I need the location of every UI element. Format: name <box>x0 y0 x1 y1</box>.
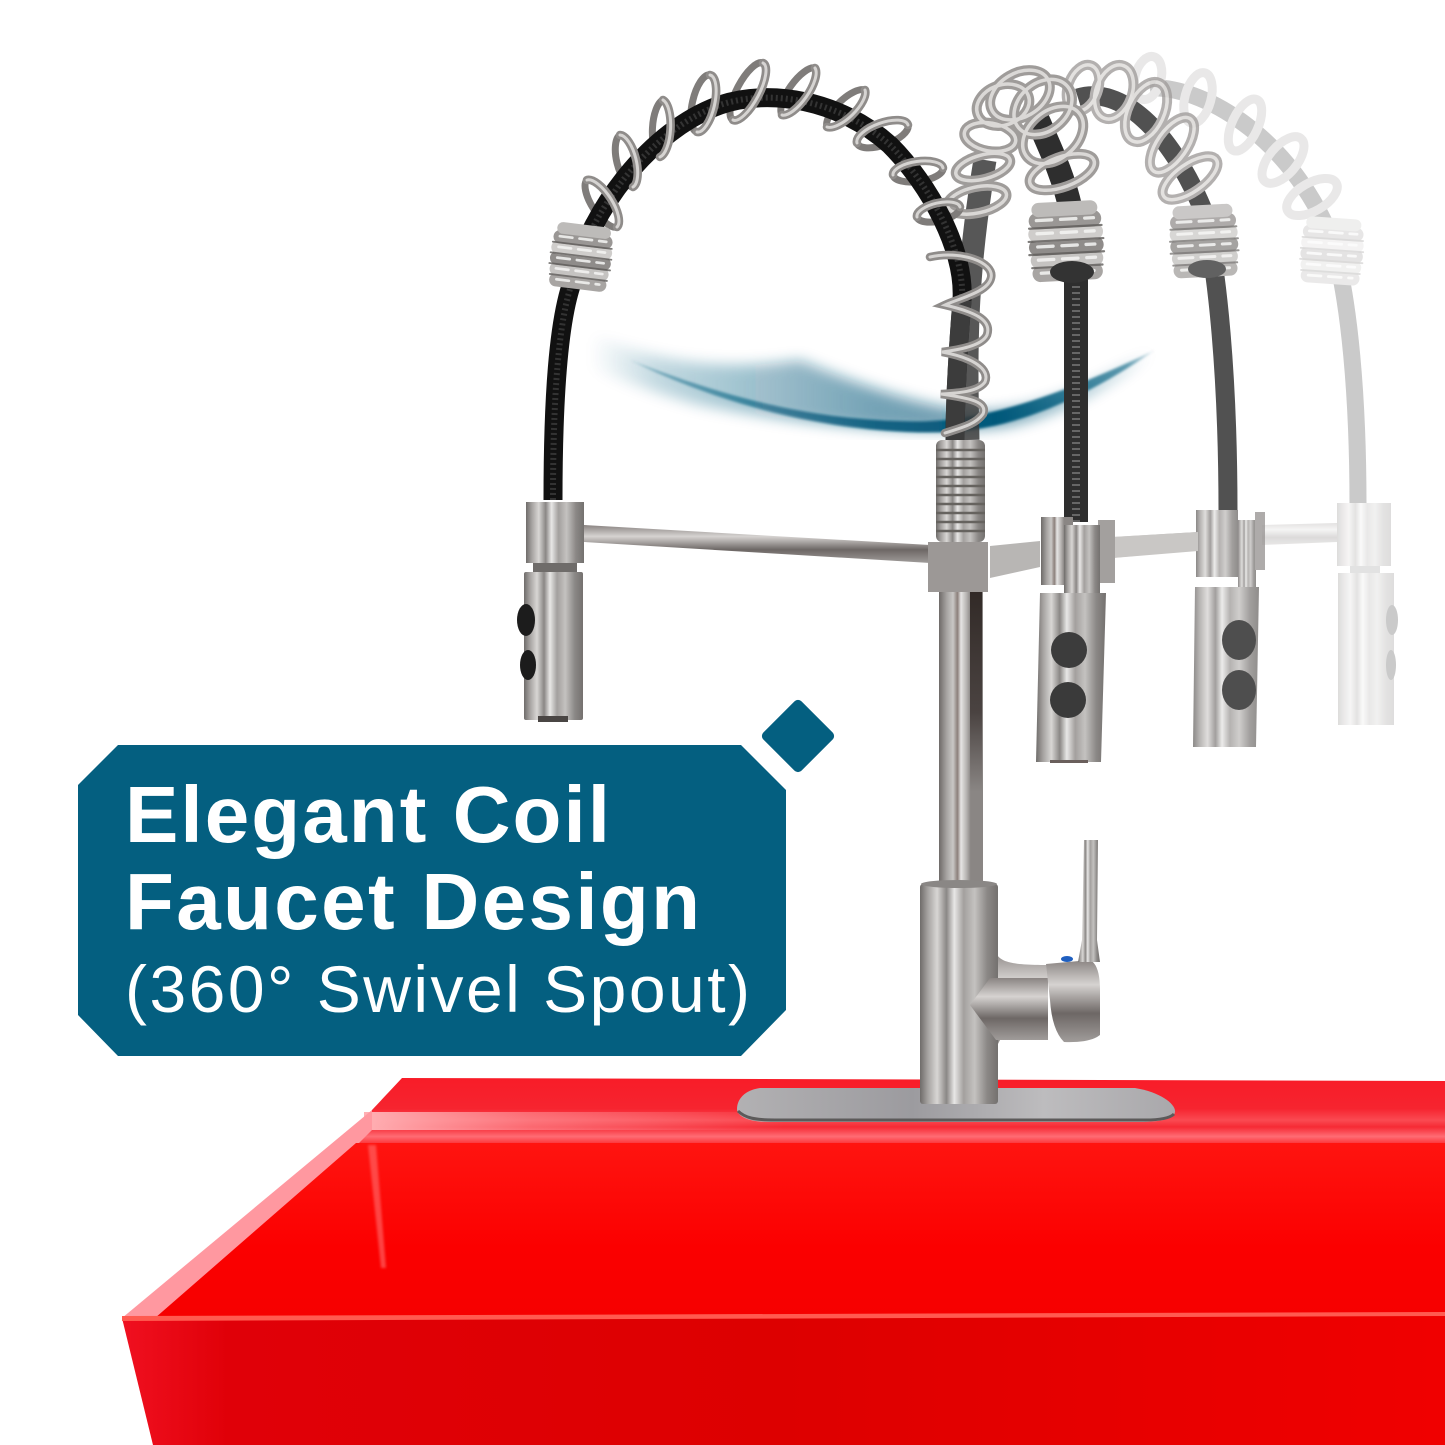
ghost coil bundle <box>1027 200 1105 283</box>
handle indicator <box>1061 956 1073 962</box>
ghost sprayer head <box>1337 503 1398 725</box>
sink front edge highlight <box>122 1312 1445 1321</box>
ghost spout bar <box>1262 523 1337 545</box>
callout: feature label <box>78 698 836 1056</box>
sink basin <box>122 1078 1445 1445</box>
ghost hose <box>1078 96 1228 512</box>
spout bar <box>584 525 930 563</box>
callout heading line 1: Elegant Coil <box>125 770 610 859</box>
sprayer buttons <box>517 604 535 636</box>
sprayer tip <box>538 716 568 722</box>
coil front highlights <box>587 63 991 433</box>
sink inner corner highlight <box>368 1145 386 1268</box>
handle lever <box>1078 840 1100 962</box>
sink rim highlight <box>364 1112 784 1130</box>
lower coil sleeve <box>936 440 985 542</box>
ghost hose <box>1150 88 1358 505</box>
ghost spout bar <box>1112 532 1198 558</box>
ghost coils <box>1061 60 1224 208</box>
swoosh soft band <box>590 335 1155 430</box>
ghost sprayer head <box>1193 510 1265 747</box>
coil front strands <box>587 63 991 433</box>
callout panel <box>78 745 786 1056</box>
ghost hose overlay on stem <box>955 300 962 442</box>
sink left rim <box>122 1110 372 1320</box>
coil bundle <box>547 221 615 293</box>
sprayer collar <box>526 502 584 563</box>
handle cap <box>1046 960 1100 1042</box>
ghost spout bar <box>990 541 1040 578</box>
sink inner wall <box>155 1143 1445 1318</box>
ghost coils <box>945 60 1099 219</box>
ghost sprayer head <box>1036 517 1115 763</box>
stem shadow <box>970 592 982 792</box>
ghost coil highlights <box>945 60 1099 219</box>
ghost coil highlights <box>1061 60 1224 208</box>
stem collar <box>928 542 988 592</box>
mixer nose <box>970 978 1048 1040</box>
ghost faucet near <box>945 60 1198 763</box>
faucet base assembly <box>737 840 1175 1122</box>
sprayer body <box>524 572 583 720</box>
ghost faucet middle <box>1061 60 1265 747</box>
main faucet <box>517 63 991 887</box>
ghost coil bundle <box>1298 216 1365 286</box>
ghost hose <box>967 160 985 440</box>
main hose <box>553 98 962 500</box>
ghost coil bundle <box>1168 203 1240 279</box>
stem <box>939 592 983 887</box>
swivel motion swoosh <box>590 335 1155 432</box>
ghost coils <box>1130 53 1343 223</box>
callout heading line 2: Faucet Design <box>125 857 700 946</box>
mixer shoulder <box>995 950 1048 1050</box>
callout subheading: (360° Swivel Spout) <box>125 952 750 1026</box>
sink front wall <box>122 1314 1445 1445</box>
ghost spout bar extension <box>1113 532 1198 558</box>
coil back strands <box>585 63 960 227</box>
ghost faucet far right <box>1130 53 1398 725</box>
base plate <box>737 1088 1175 1122</box>
sink back rim <box>355 1078 1445 1146</box>
mixer body <box>920 884 998 1104</box>
sprayer neck <box>533 563 577 573</box>
swoosh core <box>630 350 1155 432</box>
callout diamond <box>760 698 836 774</box>
